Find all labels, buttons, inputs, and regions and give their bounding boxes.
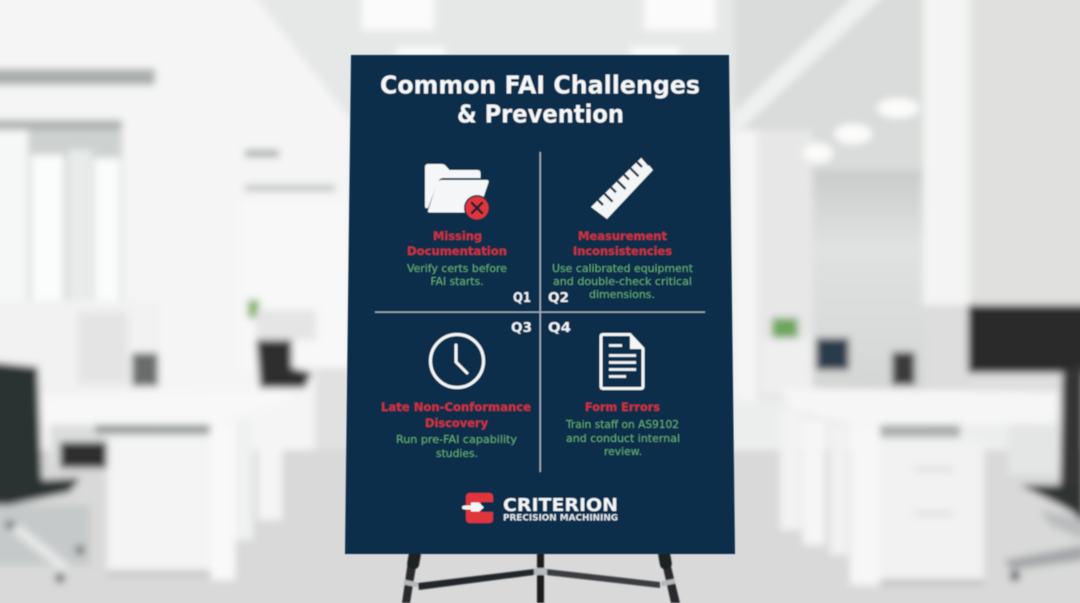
text: prevention tip Q2: and double-check critical [553, 276, 692, 288]
text: prevention tip Q4: Train staff on AS9102 [565, 419, 679, 431]
text: prevention tip Q1: Verify certs before [407, 263, 507, 275]
icon: folder with red x [425, 164, 490, 221]
text: prevention tip Q2: dimensions. [589, 289, 655, 301]
heading: measurement inconsistencies: Measurement [578, 229, 667, 243]
title [380, 70, 700, 128]
heading: missing documentation: Missing [433, 229, 482, 243]
heading: form errors: Form Errors [585, 400, 660, 414]
panel: Q4 form errors [548, 320, 680, 458]
heading: measurement inconsistencies [573, 229, 672, 258]
text: prevention tip Q3: Run pre-FAI capability [396, 434, 517, 446]
text: prevention tip Q1: FAI starts. [430, 276, 484, 288]
text: company name: CRITERION [503, 496, 618, 516]
panel: Q2 measurement inconsistencies [548, 157, 693, 306]
heading: measurement inconsistencies: Inconsistencies [573, 244, 672, 258]
text: prevention tip Q3 [396, 434, 517, 460]
text: company name [503, 496, 618, 524]
heading: missing documentation: Documentation [407, 244, 507, 258]
title: & Prevention [457, 100, 624, 128]
icon: clock [430, 334, 484, 388]
quadrant divider lines [375, 152, 705, 472]
poster board [345, 55, 735, 554]
label: Q1: Q1 [513, 290, 531, 306]
text: prevention tip Q4 [565, 419, 680, 458]
panel: Q1 missing documentation [407, 164, 531, 306]
label: Q4: Q4 [548, 320, 571, 336]
text: company name: PRECISION MACHINING [503, 514, 618, 524]
logo: Criterion Precision Machining [462, 493, 618, 524]
text: prevention tip Q4: and conduct internal [566, 433, 680, 445]
text: prevention tip Q2: Use calibrated equipment [552, 263, 693, 275]
text: prevention tip Q2 [552, 263, 693, 301]
panel: Q3 late non-conformance discovery [381, 320, 532, 460]
label: Q3: Q3 [511, 320, 532, 336]
label: Q2: Q2 [548, 290, 569, 306]
text: prevention tip Q4: review. [604, 446, 642, 458]
heading: late non-conformance discovery [381, 400, 531, 430]
text: prevention tip Q3: studies. [436, 448, 478, 460]
icon: ruler [591, 157, 653, 219]
icon: document [601, 334, 643, 388]
heading: late non-conformance discovery: Discovery [425, 416, 488, 430]
icon: red C mark with tool [462, 493, 494, 523]
heading: late non-conformance discovery: Late Non-Conformance [381, 400, 531, 414]
title: Common FAI Challenges [380, 70, 700, 100]
heading: missing documentation [407, 229, 507, 258]
text: prevention tip Q1 [407, 263, 507, 288]
easel [402, 548, 680, 603]
